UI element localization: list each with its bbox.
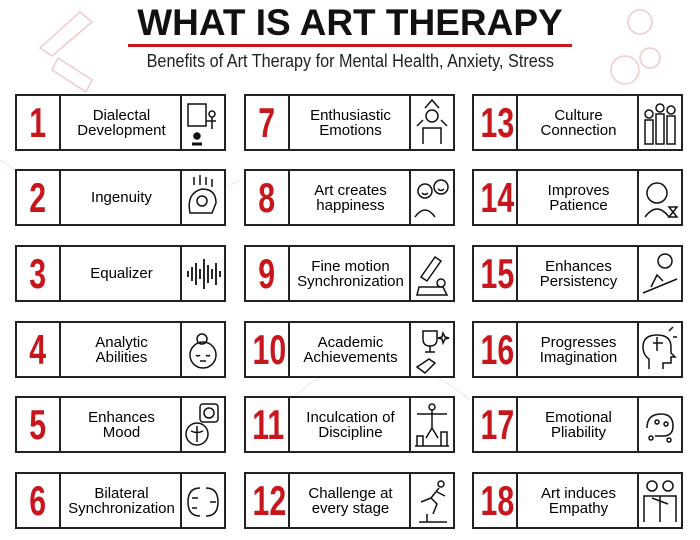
card 6: 6 <box>30 477 46 524</box>
card 17: 17 <box>481 401 514 448</box>
card 11: Inculcation of <box>306 408 395 426</box>
card 5 <box>15 396 226 453</box>
card 1 <box>15 94 226 151</box>
card 1: Dialectal <box>93 106 150 124</box>
card 5: 5 <box>30 401 46 448</box>
card 10 <box>244 321 455 378</box>
card 12: 12 <box>253 477 286 524</box>
card 4 <box>15 321 226 378</box>
card 18: Art induces <box>541 484 616 502</box>
card 16: 16 <box>481 326 514 373</box>
card 15: 15 <box>481 250 514 297</box>
card 9: Synchronization <box>297 272 404 290</box>
card 2 <box>15 169 226 226</box>
card 8: happiness <box>316 196 385 214</box>
card 13: Connection <box>541 122 616 138</box>
card 18: Empathy <box>549 500 608 516</box>
card 2: Ingenuity <box>91 189 152 206</box>
card 15: Enhances <box>545 258 612 274</box>
card 15: Persistency <box>540 272 617 290</box>
card 13 <box>472 94 683 151</box>
card 11 <box>244 396 455 453</box>
card 17: Pliability <box>551 424 606 440</box>
card 4: 4 <box>30 326 46 373</box>
card 16 <box>472 321 683 378</box>
card 7 <box>244 94 455 151</box>
card 8: 8 <box>259 174 275 221</box>
card 17 <box>472 396 683 453</box>
subtitle: Benefits of Art Therapy for Mental Health, Anxiety, Stress <box>146 51 554 71</box>
card 6: Synchronization <box>68 500 175 516</box>
card 5: Mood <box>103 424 140 440</box>
card 8: Art creates <box>314 182 387 198</box>
card 9 <box>244 245 455 302</box>
card 10: 10 <box>253 326 286 373</box>
card 14: Patience <box>549 196 608 214</box>
card 14 <box>472 169 683 226</box>
card 14: 14 <box>481 174 514 221</box>
card 18: 18 <box>481 477 514 524</box>
card 9: Fine motion <box>311 258 390 274</box>
card 6 <box>15 472 226 529</box>
card 5: Enhances <box>88 408 155 426</box>
card 10: Academic <box>318 334 383 350</box>
title: WHAT IS ART THERAPY <box>137 2 563 43</box>
card 15 <box>472 245 683 302</box>
card 16: Progresses <box>541 334 616 350</box>
card 4: Analytic <box>95 334 148 350</box>
card 7: 7 <box>259 99 275 146</box>
card 1: 1 <box>30 99 46 146</box>
card 16: Imagination <box>540 348 617 366</box>
card 7: Enthusiastic <box>310 106 391 124</box>
card 18 <box>472 472 683 529</box>
card 1: Development <box>77 122 166 138</box>
card 3: Equalizer <box>90 265 153 282</box>
card 12 <box>244 472 455 529</box>
card 3: 3 <box>30 250 46 297</box>
card 10: Achievements <box>303 348 398 366</box>
card 11: Discipline <box>318 424 383 440</box>
card 9: 9 <box>259 250 275 297</box>
card 7: Emotions <box>319 122 382 138</box>
card 6: Bilateral <box>94 484 149 502</box>
card 17: Emotional <box>545 408 612 426</box>
card 2: 2 <box>30 174 46 221</box>
card 14: Improves <box>548 182 609 198</box>
card 3 <box>15 245 226 302</box>
card 8 <box>244 169 455 226</box>
card 11: 11 <box>252 401 284 448</box>
card 4: Abilities <box>96 348 147 366</box>
card 13: Culture <box>554 106 603 124</box>
card 12: Challenge at <box>308 484 393 502</box>
card 13: 13 <box>481 99 514 146</box>
card 12: every stage <box>312 500 389 516</box>
title underline <box>128 44 572 47</box>
